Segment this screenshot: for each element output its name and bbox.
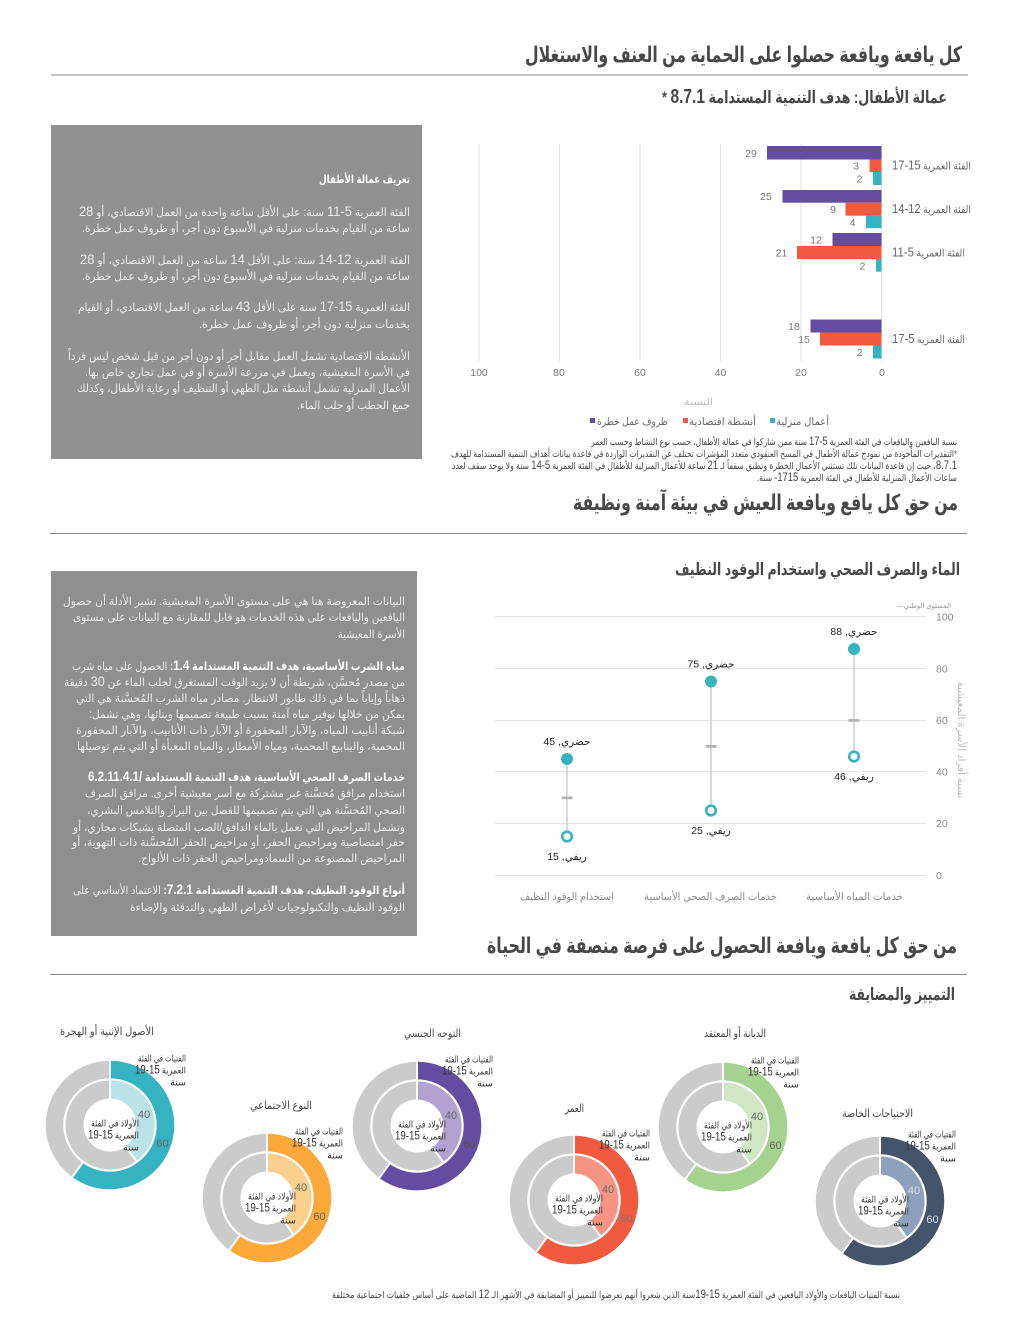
donut: special needs: 60 [926,1214,939,1226]
bars: age 5-17 [810,320,882,358]
panel: child labour definition: الفئة العمرية 15-17 سنة على الأقل 43 ساعة من العمل الاقتصادي، أو القيام [78,298,410,315]
y axis labels: 40 [936,766,948,778]
donut: religion or belief: 40 [751,1111,763,1123]
x axis categories [520,890,903,903]
panel: child labour definition: ساعة من القيام بخدمات منزلية في الأسبوع دون أجر، أو ظروف عمل خطرة. [82,220,410,236]
panel: water and sanitation definitions: مياه الشرب الأساسية، هدف التنمية المستدامة 1.4: الحصول على مياه شرب [72,657,405,674]
category labels: الفئة العمرية 12-14 [892,201,971,216]
donut: religion or belief: سنة [783,1080,799,1090]
panel: water and sanitation definitions: يمكن من خلالها توفير مياه آمنة بسبب طبيعة تصميمها وبنائها، وهي تشمل: [89,707,405,722]
donut: age: الأولاد في الفئة [555,1192,603,1204]
donut: ethnic origins or migration: 60 [156,1138,169,1150]
footnote: child labour: نسبة اليافعين واليافعات في الفئة العمرية 5-17 سنة ممن شاركوا في عمالة الأطفال، حسب نوع النشاط وحسب العمر [590,436,957,448]
series: basic sanitation services: حضري, 75 [687,658,735,670]
donut: special needs: الفتيات في الفئة [908,1130,956,1140]
donut: religion or belief [668,1026,799,1182]
bar value labels: 18 [788,321,800,333]
bar value labels: 25 [760,191,772,203]
x axis categories: استخدام الوقود النظيف [520,891,614,903]
donut: sexual orientation: سنة [430,1144,446,1154]
series: basic sanitation services [687,658,735,837]
series: clean fuel use: ريفي, 15 [547,851,587,863]
dumbbell chart: urban vs rural access [495,601,969,903]
donut: social gender: سنة [327,1150,343,1162]
bar value labels: 2 [860,260,866,272]
donut: sexual orientation: 60 [463,1139,476,1151]
panel: child labour definition: جمع الحطب أو جلب الماء. [297,397,410,413]
bar value labels: 2 [857,174,863,186]
axis title: النسبة [684,397,713,408]
donut: social gender: العمرية 15-19 [292,1138,343,1150]
bar value labels: 12 [810,234,822,246]
y axis labels: 0 [936,870,942,882]
bar value labels [745,148,866,359]
donut: special needs: سنة [893,1218,909,1230]
panel: water and sanitation definitions: الوقود النظيف والتكنولوجيات لأغراض الطهي والتدفئة والإضاءة [130,900,405,915]
donut: religion or belief: العمرية 15-19 [748,1066,799,1078]
donut: age: العمرية 15-19 [552,1204,603,1216]
donut: social gender: العمرية 15-19 [245,1202,296,1214]
donut: special needs: الأولاد في الفئة [861,1194,909,1206]
value axis labels: 80 [553,367,565,379]
panel: water and sanitation definitions [51,571,417,936]
panel: child labour definition: الأعمال المنزلية تشمل أنشطة مثل الطهي أو التنظيف أو رعاية الأطفال، وكذلك [77,380,410,396]
panel: water and sanitation definitions: الصحي المُحسَّنة هي التي يتم تصميمها للفصل بين البراز والتلامس البشري، [87,804,405,818]
panel: child labour definition: في الأسرة المعيشية، ويعمل في مزرعة الأسرة أو في عمل تجاري خاص بها. [85,364,410,380]
bar value labels: 21 [776,248,787,260]
y axis labels: 80 [936,664,948,676]
panel: child labour definition: بخدمات منزلية دون أجر، أو ظروف عمل خطرة. [199,316,410,332]
panel: child labour definition: ساعة من القيام بخدمات منزلية في الأسبوع دون أجر، أو ظروف عمل خطرة. [82,268,410,284]
bar value labels: 9 [830,204,836,216]
panel: water and sanitation definitions: اليافعين واليافعات على هذه الخدمات هو قابل للمقارنة مع البيانات على مستوى [73,612,405,625]
donut: age: العمر [564,1103,584,1115]
value axis labels [470,367,885,379]
category labels: الفئة العمرية 5-17 [892,331,965,346]
panel: water and sanitation definitions: المراحيض المصنوعة من السمادومراحيض الحفر ذات الألواح. [138,851,405,866]
panel: child labour definition: الأنشطة الاقتصادية تشمل العمل مقابل أجر أو دون أجر من قبل شخص ليس فرداً [68,347,410,364]
donut: social gender: الفتيات في الفئة [295,1126,343,1138]
donut: ethnic origins or migration [54,1024,186,1180]
donut: religion or belief: الديانة أو المعتقد [704,1026,766,1040]
donut: sexual orientation: سنة [477,1078,493,1090]
donut: ethnic origins or migration: الأصول الإثنية أو الهجرة [60,1024,154,1038]
series: basic sanitation services: ريفي, 25 [691,825,731,837]
donut: religion or belief: سنة [736,1144,752,1156]
legend: أعمال منزلية [776,414,829,428]
donut: social gender: 60 [313,1211,326,1223]
value axis labels: 20 [795,367,807,379]
bar value labels: 29 [745,148,757,160]
national level legend: المستوى الوطني— [897,601,951,610]
y axis labels: 20 [936,818,948,830]
donut: age [518,1103,650,1256]
value axis labels: 100 [470,367,488,379]
panel: child labour definition [51,125,422,459]
y axis labels: 60 [936,715,948,727]
donut: sexual orientation: العمرية 15-19 [442,1066,493,1078]
bar chart: child labour by age and activity [470,144,971,408]
series: basic water services: حضري, 88 [830,626,878,638]
bar value labels: 2 [857,347,863,359]
bar value labels: 4 [850,217,856,229]
bar value labels: 15 [798,334,810,346]
panel: water and sanitation definitions: وتشمل المراحيض التي تعمل بالماء الدافق/الصب المتصلة بشبكات مجاري، أو [72,819,405,835]
footnote: child labour [451,436,957,484]
category labels: الفئة العمرية 5-11 [892,244,965,260]
value axis labels: 40 [715,367,726,379]
panel: water and sanitation definitions: المحمية، والينابيع المحمية، ومياه الأمطار، والمياه المعبأة أو التي يتم توصيلها [77,738,405,754]
donut: social gender: الأولاد في الفئة [248,1190,296,1202]
panel: water and sanitation definitions: استخدام مرافق مُحسَّنة غير مشتركة مع أسر معيشية أخرى. مرافق الصرف [85,785,405,801]
category labels: الفئة العمرية 15-17 [892,158,971,172]
donut: special needs: العمرية 15-19 [905,1140,956,1152]
bars: age 5-11 [797,233,882,272]
bar value labels: 3 [853,160,859,172]
donut: age: سنة [634,1152,650,1164]
panel: water and sanitation definitions: الأسرة المعيشية. [335,627,405,642]
donut: special needs: العمرية 15-19 [858,1206,909,1218]
donut: sexual orientation [362,1028,493,1182]
panel: water and sanitation definitions: شبكة أنابيب المياه، والآبار المحفورة أو الآبار ذات الأنابيب، والآبار المحفورة [76,722,405,738]
donut: ethnic origins or migration: 40 [138,1109,150,1121]
donut: ethnic origins or migration: سنة [123,1142,139,1154]
bars: age 12-14 [782,190,882,228]
donut: special needs: سنة [940,1154,956,1164]
donut: social gender: النوع الاجتماعي [250,1100,312,1112]
donut: sexual orientation: الأولاد في الفئة [398,1118,446,1130]
legend: ظروف عمل خطرة [597,416,668,428]
donut: religion or belief: العمرية 15-19 [701,1132,752,1144]
series: basic water services [830,626,878,783]
value axis labels: 0 [879,367,885,379]
donut: sexual orientation: الفتيات في الفئة [445,1054,493,1066]
heading: discrimination and harassment: التمييز والمضايقة [849,985,955,1005]
series: clean fuel use: حضري, 45 [543,736,591,748]
donut: religion or belief: الفتيات في الفئة [751,1056,799,1066]
donut: social gender [212,1100,343,1254]
category labels [892,158,971,346]
donut: age: العمرية 15-19 [599,1140,650,1152]
donut: social gender: 40 [295,1182,307,1194]
legend: أنشطة اقتصادية [689,414,756,428]
donut: special needs: 40 [908,1185,920,1197]
bars: age 15-17 [767,146,882,185]
panel: water and sanitation definitions: أنواع الوقود النظيف، هدف التنمية المستدامة 7.2.1: الاعتماد الأساسي على [73,881,405,898]
panel: water and sanitation definitions: من مصدر مُحسَّن، شريطة أن لا يزيد الوقت المستغرق لجلب الماء عن 30 دقيقة [64,673,405,690]
heading: child labour SDG: عمالة الأطفال: هدف التنمية المستدامة 8.7.1 * [662,85,947,108]
series: basic water services: ريفي, 46 [834,771,874,783]
panel: child labour definition: تعريف عمالة الأطفال [319,172,410,186]
y axis labels: 100 [936,612,954,624]
donut: religion or belief: الأولاد في الفئة [704,1120,752,1132]
donut: social gender: سنة [280,1216,296,1226]
donut: sexual orientation: 40 [445,1110,457,1122]
donut: ethnic origins or migration: سنة [170,1078,186,1088]
panel: water and sanitation definitions: ذهاباً وإياباً بما في ذلك طابور الانتظار. مصادر مياه الشرب المُحسَّنة هي التي [76,689,405,706]
donut: special needs: الاحتياجات الخاصة [842,1108,913,1120]
donut: special needs [824,1108,956,1256]
panel: water and sanitation definitions: خدمات الصرف الصحي الأساسية، هدف التنمية المستدامة /6.2.11.4.1 [88,768,405,784]
donut: religion or belief: 60 [769,1140,782,1152]
donut: age: سنة [587,1218,603,1228]
x axis categories: خدمات الصرف الصحي الأساسية [644,890,777,903]
donut: ethnic origins or migration: الأولاد في الفئة [91,1118,139,1130]
y axis labels [936,612,954,882]
value axis labels: 60 [634,367,646,379]
donut: age: 60 [620,1213,633,1225]
x axis categories: خدمات المياه الأساسية [806,890,903,903]
panel: child labour definition: الفئة العمرية 12-14 سنة: على الأقل 14 ساعة من العمل الاقتصادي، أو 28 [80,251,410,268]
y axis title: نسبة أفراد الأسرة المعيشية [955,682,969,798]
donut: ethnic origins or migration: العمرية 15-19 [88,1130,139,1142]
donut: sexual orientation: العمرية 15-19 [395,1130,446,1142]
donut: sexual orientation: التوجه الجنسي [404,1028,461,1040]
footnote: child labour: 8.7.1، حيث إن قاعدة البيانات تلك تستثني الأعمال الخطرة وتطبق سقفاً لـ 21 ساعة للأعمال المنزلية للأطفال في الفئة العمرية 5-14 سنة ولا يوجد سقف لعدد [452,459,957,472]
panel: water and sanitation definitions: حفر امتصاصية ومراحيض الحفر، أو مراحيض الحفر المُحسَّنة ذات التهوية، أو [71,834,405,850]
legend [590,414,829,428]
donut: ethnic origins or migration: الفتيات في الفئة [138,1054,186,1064]
series: clean fuel use [543,736,591,863]
donut: age: الفتيات في الفئة [602,1128,650,1140]
donut: age: 40 [602,1184,614,1196]
footnote: child labour: ساعات الأعمال المنزلية للأطفال في الفئة العمرية 1715- سنة. [757,472,957,484]
donut: ethnic origins or migration: العمرية 15-19 [135,1064,186,1076]
panel: water and sanitation definitions: البيانات المعروضة هنا هي على مستوى الأسرة المعيشية. تشير الأدلة أن حصول [63,593,405,609]
panel: child labour definition: الفئة العمرية 5-11 سنة: على الأقل ساعة واحدة من العمل الاقتصادي، أو 28 [79,203,410,220]
footnote: discrimination: نسبة الفتيات اليافعات والأولاد اليافعين في الفئة العمرية 15-19سنة الذين شعروا أنهم تعرضوا للتمييز أو المضايقة في الأشهر الـ 12 الماضية على أساس خلفيات اجتماعية مختلفة [332,1288,900,1301]
